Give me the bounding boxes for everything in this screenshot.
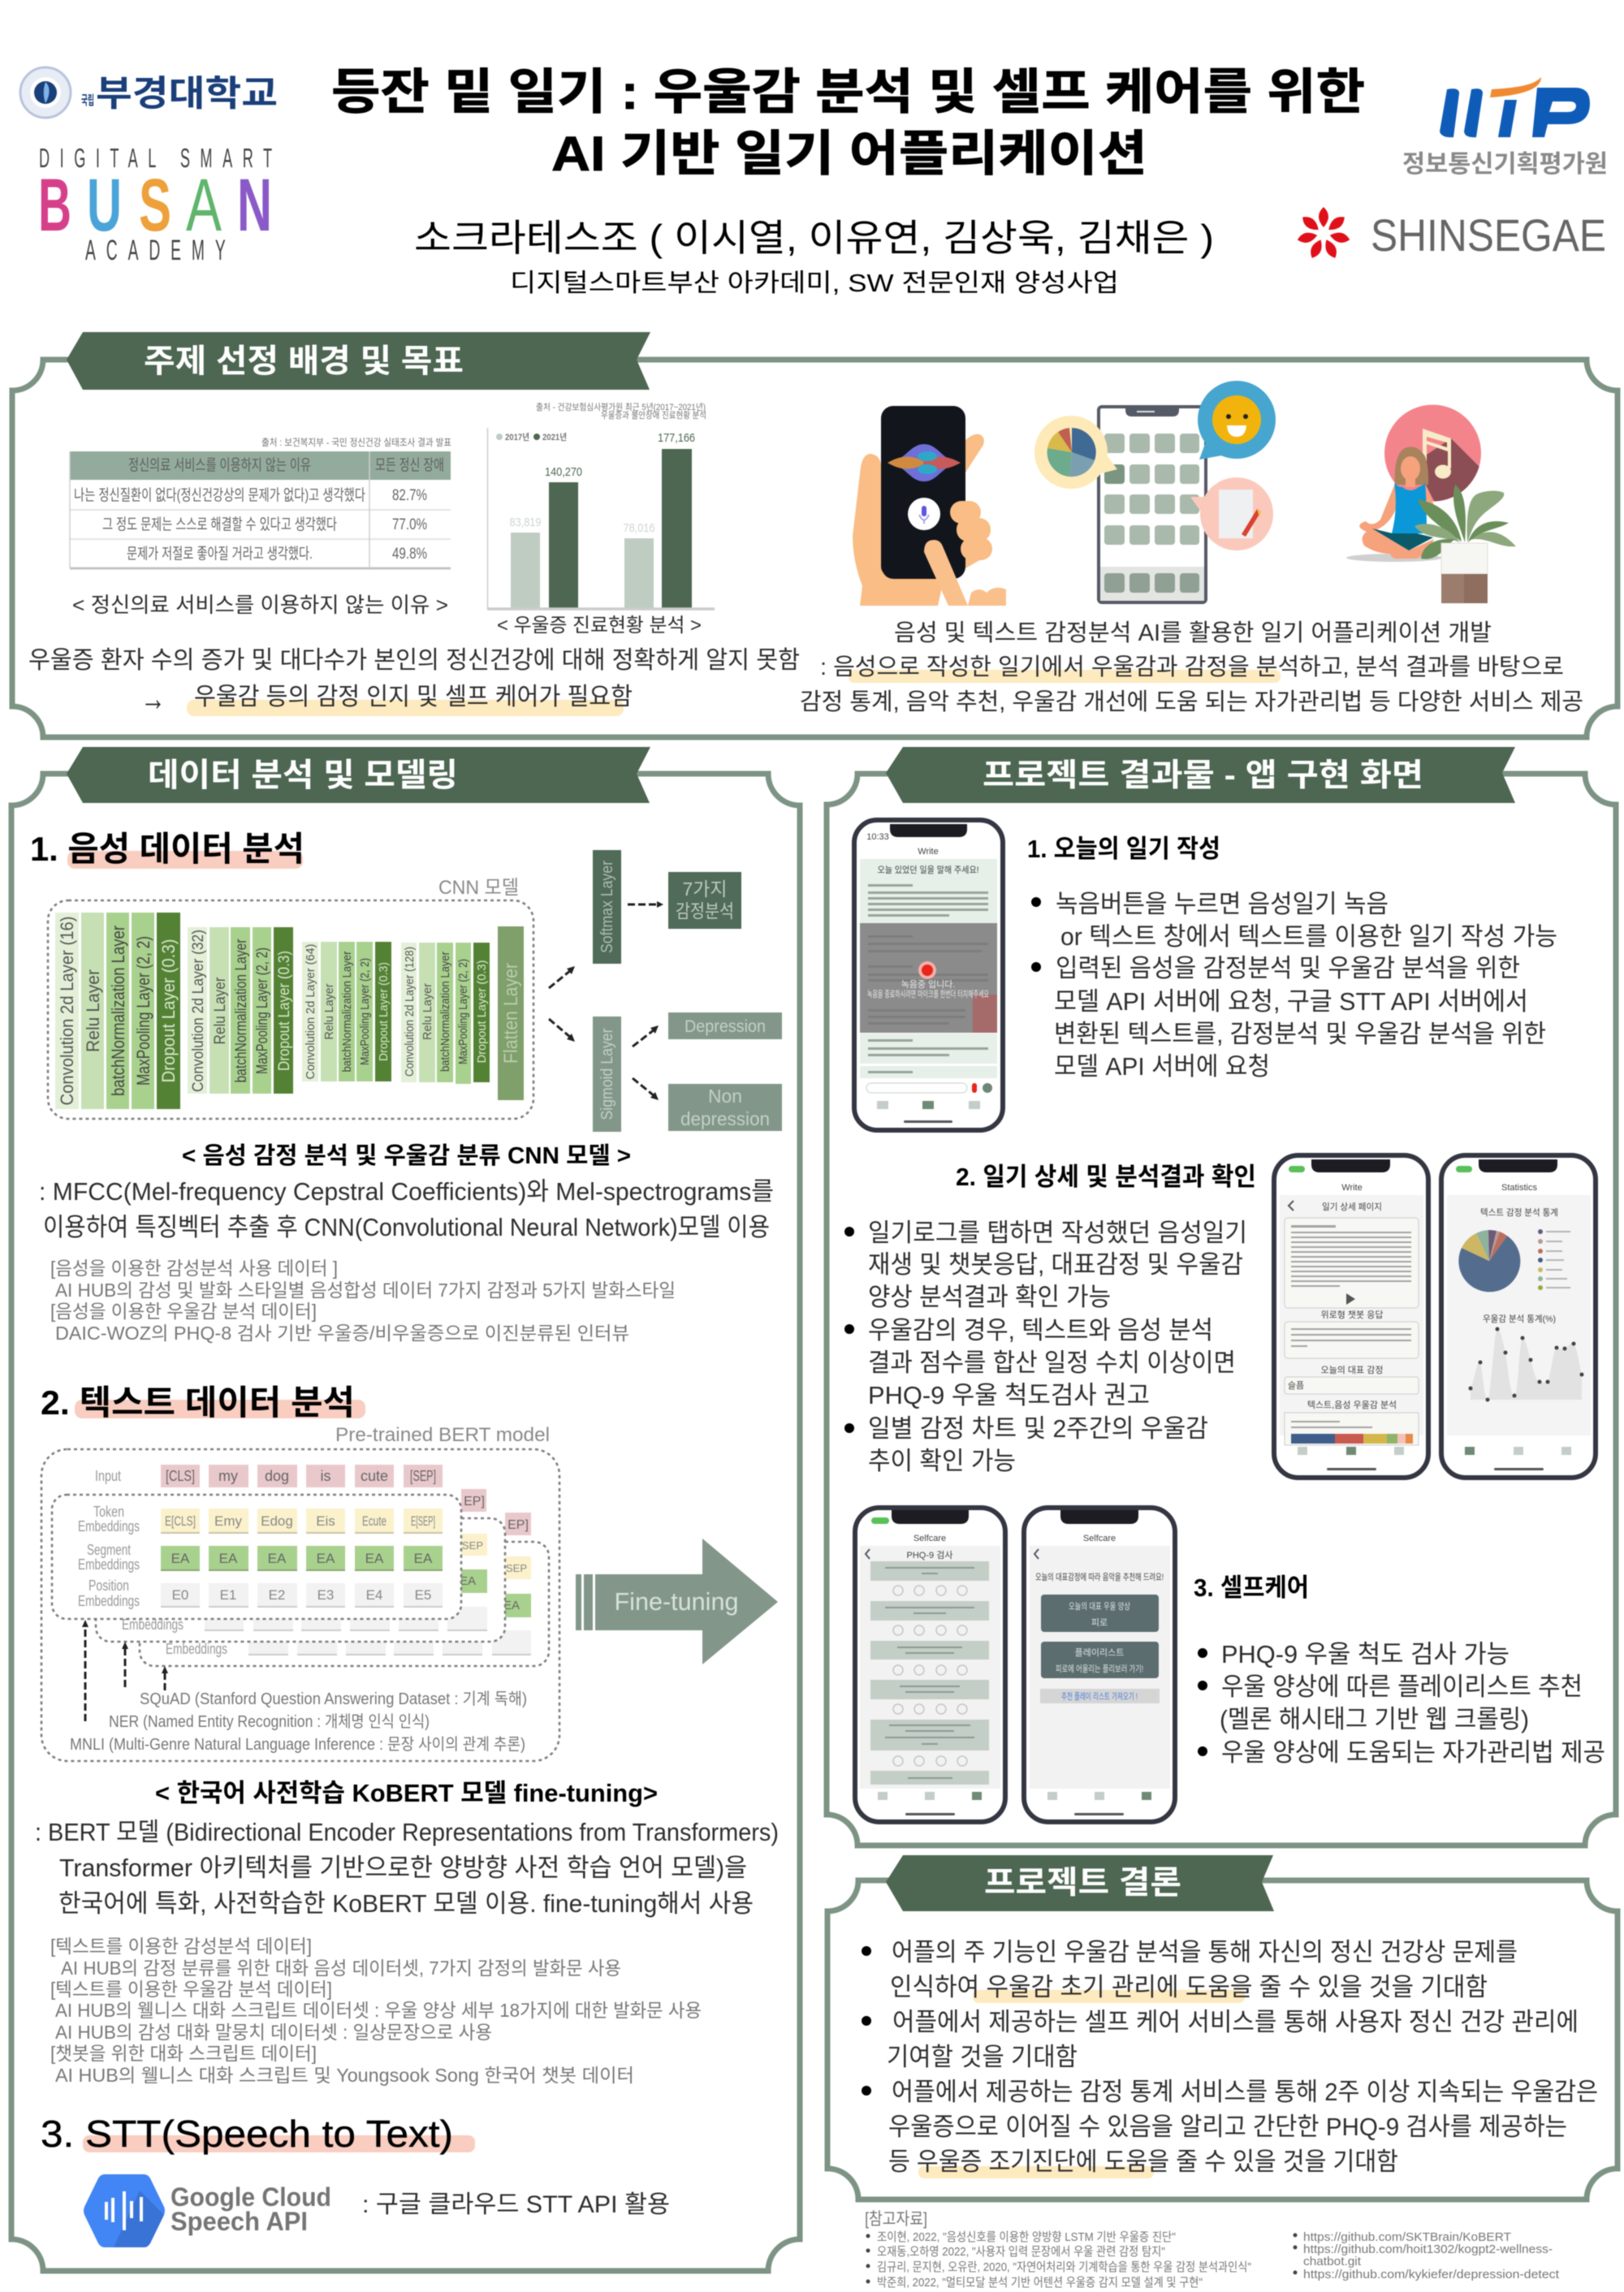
text: app development goal: : 음성으로 작성한 일기에서 우울감과 감정을 분석하고, 분석 결과를 바탕으로 <box>820 654 1564 680</box>
list: step 2 details: 일별 감정 차트 및 2주간의 우울감 <box>868 1414 1208 1443</box>
text: BERT explanation <box>35 1818 779 1918</box>
phone: playlist: 플레이리스트 <box>1075 1647 1124 1658</box>
token embeddings <box>161 1509 443 1533</box>
list: step 2 details: 우울감의 경우, 텍스트와 음성 분석 <box>868 1316 1213 1345</box>
phone: diary detail <box>1274 1155 1428 1478</box>
phone: diary writing: 녹음중 입니다. <box>901 979 955 990</box>
embeddings labels: Segment <box>87 1542 131 1558</box>
list: step 2 details: 결과 점수를 합산 일정 수치 이상이면 <box>868 1349 1236 1377</box>
logo: Digital Smart Busan Academy: S <box>139 164 171 247</box>
output: seven emotions <box>668 872 741 929</box>
references: 조이현, 2022, "음성신호를 이용한 양방향 LSTM 기반 우울증 진단" <box>877 2230 1176 2244</box>
heading: data analysis: 데이터 분석 및 모델링 <box>148 758 458 793</box>
text: background explanation <box>28 647 800 719</box>
text: text datasets: [텍스트를 이용한 감성분석 데이터] <box>50 1936 312 1957</box>
title <box>331 65 1365 181</box>
subheading: STT: 3. STT(Speech to Text) <box>41 2113 453 2155</box>
layer group 4 <box>401 943 490 1084</box>
phone: diary detail: Write <box>1341 1183 1363 1193</box>
phone: PHQ-9 test <box>855 1508 1005 1822</box>
layer group 1: MaxPooling Layer (2, 2) <box>133 936 153 1086</box>
references: 오재동,오하영 2022, "사용자 입력 문장에서 우울 관련 감정 탐지" <box>877 2245 1165 2259</box>
text: pre-training tasks: SQuAD (Stanford Question Answering Dataset : 기계 독해) <box>140 1690 527 1708</box>
references: chatbot.git <box>1303 2255 1362 2268</box>
heading: topic background: 주제 선정 배경 및 목표 <box>144 343 464 379</box>
text: app development goal <box>800 619 1583 715</box>
text: MFCC explanation: : MFCC(Mel-frequency Cepstral Coefficients)와 Mel-spectrograms를 <box>39 1177 774 1206</box>
phone: diary detail: 텍스트,음성 우울감 분석 <box>1307 1400 1397 1410</box>
token embeddings: Eis <box>316 1513 335 1529</box>
sigmoid layer: Sigmoid Layer <box>598 1028 616 1120</box>
phone: statistics <box>1441 1155 1596 1478</box>
softmax layer: Softmax Layer <box>598 861 616 953</box>
list: step 2 details: 일기로그를 탭하면 작성했던 음성일기 <box>868 1219 1247 1247</box>
list: step 1 details: 모델 API 서버에 요청 <box>1054 1052 1270 1081</box>
position embeddings: E3 <box>317 1587 334 1603</box>
logo: Pukyong National University <box>20 67 278 118</box>
table: reasons for not using services: 49.8% <box>392 546 427 563</box>
text: pre-training tasks: MNLI (Multi-Genre Natural Language Inference : 문장 사이의 관계 추론) <box>70 1735 525 1754</box>
icon: pie chart bubble <box>1034 416 1117 489</box>
back encoder stack 3: EP] <box>508 1518 529 1532</box>
layer group 2: Dropout Layer (0.3) <box>276 951 293 1071</box>
text: voice datasets <box>50 1258 676 1344</box>
input row: [SEP] <box>410 1468 436 1484</box>
text: text datasets: [챗봇을 위한 대화 스크립트 데이터] <box>50 2043 317 2064</box>
logo: IITP: 정보통신기획평가원 <box>1402 151 1608 178</box>
logo: Digital Smart Busan Academy <box>38 143 272 265</box>
arrow: fine-tuning <box>576 1539 778 1664</box>
embeddings labels: Position <box>89 1578 129 1594</box>
caption: KoBERT: < 한국어 사전학습 KoBERT 모델 fine-tuning> <box>155 1779 658 1807</box>
icon: potted plant <box>1415 485 1516 603</box>
position embeddings <box>161 1583 443 1607</box>
logo: Digital Smart Busan Academy: DIGITAL SMART <box>39 143 272 173</box>
segment embeddings: EA <box>268 1551 287 1566</box>
token embeddings: Ecute <box>362 1513 387 1529</box>
list: step 3 details: PHQ-9 우울 척도 검사 가능 <box>1221 1640 1510 1668</box>
input row <box>95 1465 443 1487</box>
output: depression <box>668 1012 782 1039</box>
list: step 1 details: 모델 API 서버에 요청, 구글 STT API 서버에서 <box>1054 987 1528 1016</box>
text: voice datasets: [음성을 이용한 우울감 분석 데이터] <box>50 1301 317 1322</box>
text: step 3: 3. 셀프케어 <box>1194 1573 1309 1602</box>
list: step 2 details: 재생 및 챗봇응답, 대표감정 및 우울감 <box>868 1250 1243 1279</box>
back encoder stack 3: EA <box>503 1599 520 1612</box>
pie chart: emotion statistics <box>1458 1229 1570 1292</box>
layer group 2: Relu Layer <box>212 977 229 1044</box>
layer group 3 <box>302 942 391 1081</box>
layer group 4: batchNormalization Layer <box>438 952 452 1072</box>
layer group 2: batchNormalization Layer <box>233 939 250 1083</box>
text: text datasets <box>50 1936 702 2086</box>
list: step 1 details: 변환된 텍스트를, 감정분석 및 우울감 분석을 위한 <box>1054 1020 1546 1048</box>
icon: smiley bubble <box>1198 381 1276 460</box>
softmax layer <box>593 850 621 964</box>
list: conclusions: 어플의 주 기능인 우울감 분석을 통해 자신의 정신 건강상 문제를 <box>892 1938 1518 1966</box>
token embeddings: E[SEP] <box>411 1513 435 1529</box>
layer group 1 <box>55 913 180 1109</box>
text: background explanation: 우울감 등의 감정 인지 및 셀프 케어가 필요함 <box>194 684 633 710</box>
phone: playlist: 오늘의 대표 우울 양상 <box>1069 1601 1130 1612</box>
text: step 2: 2. 일기 상세 및 분석결과 확인 <box>956 1163 1256 1191</box>
arrows between layers <box>549 901 663 1100</box>
flatten layer <box>498 926 524 1100</box>
phone: playlist <box>1024 1508 1175 1822</box>
text: voice datasets: AI HUB의 감성 및 발화 스타일별 음성합성 데이터 7가지 감정과 5가지 발화스타일 <box>55 1280 676 1301</box>
layer group 3: batchNormalization Layer <box>340 952 354 1072</box>
heading: app screens: 프로젝트 결과물 - 앱 구현 화면 <box>983 758 1423 793</box>
title: 등잔 밑 일기 : 우울감 분석 및 셀프 케어를 위한 <box>331 65 1365 119</box>
front encoder stack <box>52 1495 461 1619</box>
text: app development goal: 감정 통계, 음악 추천, 우울감 개선에 도움 되는 자가관리법 등 다양한 서비스 제공 <box>800 689 1583 715</box>
text: pre-training tasks: NER (Named Entity Recognition : 개체명 인식 인식) <box>109 1712 430 1731</box>
list: conclusions: 어플에서 제공하는 셀프 케어 서비스를 통해 사용자 정신 건강 관리에 <box>892 2008 1579 2036</box>
phone: diary detail: 위로형 챗봇 응답 <box>1321 1309 1383 1320</box>
bar chart: depression patient counts: 2021년 <box>542 431 567 442</box>
heading: conclusion: 프로젝트 결론 <box>984 1866 1181 1901</box>
list: step 3 details: (멜론 해시태그 기반 웹 크롤링) <box>1220 1705 1529 1733</box>
table: reasons for not using services <box>70 437 451 568</box>
back encoder stack 2: SEP <box>462 1539 483 1552</box>
input row: is <box>320 1468 331 1484</box>
heading: conclusion <box>886 1855 1274 1911</box>
list: step 1 details: or 텍스트 창에서 텍스트를 이용한 일기 작성 가능 <box>1060 922 1557 951</box>
list: step 2 details: 추이 확인 가능 <box>868 1447 1016 1475</box>
logo: Digital Smart Busan Academy: ACADEMY <box>85 234 226 265</box>
segment embeddings: EA <box>219 1551 238 1566</box>
illustration: meditating woman with music and plant <box>1346 404 1516 603</box>
token embeddings: Emy <box>214 1513 242 1529</box>
phone: playlist: 추천 플레이 리스트 가져오기 ! <box>1061 1690 1138 1702</box>
illustration: hand holding phone with voice assistant <box>853 406 1006 606</box>
line chart: depression trend <box>1468 1327 1583 1401</box>
token embeddings: Edog <box>261 1513 293 1529</box>
text: BERT explanation: 한국어에 특화, 사전학습한 KoBERT 모델 이용. fine-tuning해서 사용 <box>58 1889 754 1918</box>
text: BERT explanation: Transformer 아키텍처를 기반으로한 양방향 사전 학습 언어 모델)을 <box>59 1854 747 1882</box>
heading: topic background <box>67 332 650 390</box>
input row: cute <box>361 1468 388 1484</box>
embeddings labels: Embeddings <box>78 1593 140 1609</box>
segment embeddings <box>161 1546 443 1570</box>
caption: CNN model: < 음성 감정 분석 및 우울감 분류 CNN 모델 > <box>182 1142 631 1169</box>
diagram: BERT model <box>41 1424 559 1761</box>
bar chart: depression patient counts <box>487 402 715 609</box>
text: MFCC explanation: 이용하여 특징벡터 추출 후 CNN(Convolutional Neural Network)모델 이용 <box>43 1213 770 1241</box>
icon: voice wave <box>888 444 961 481</box>
output: seven emotions: 감정분석 <box>676 900 734 922</box>
layer group 1: batchNormalization Layer <box>108 926 128 1096</box>
references: https://github.com/SKTBrain/KoBERT <box>1303 2230 1511 2244</box>
sigmoid layer <box>593 1017 621 1132</box>
input row: my <box>218 1468 238 1484</box>
subheading: text data analysis: 2. 텍스트 데이터 분석 <box>41 1383 355 1422</box>
chart caption: < 우울증 진료현황 분석 > <box>497 615 702 637</box>
table: reasons for not using services: 그 정도 문제는 스스로 해결할 수 있다고 생각했다 <box>102 516 337 533</box>
answer buttons <box>893 1586 967 1766</box>
list: conclusions: 기여할 것을 기대함 <box>887 2043 1078 2071</box>
layer group 4: Relu Layer <box>421 983 434 1040</box>
embeddings labels: Embeddings <box>78 1518 140 1534</box>
segment embeddings: EA <box>414 1551 433 1566</box>
icon: microphone button <box>908 498 940 530</box>
phone: diary detail: 오늘의 대표 감정 <box>1321 1365 1383 1375</box>
text: step 1: 1. 오늘의 일기 작성 <box>1027 835 1220 863</box>
table caption: < 정신의료 서비스를 이용하지 않는 이유 > <box>72 593 448 617</box>
phone: playlist: Selfcare <box>1083 1534 1116 1543</box>
position embeddings: E5 <box>415 1587 431 1603</box>
woman <box>1359 447 1434 559</box>
layer group 3: Convolution 2d Layer (64) <box>304 943 317 1080</box>
output: depression: Depression <box>685 1017 766 1036</box>
subheading: voice data analysis: 1. 음성 데이터 분석 <box>30 830 304 868</box>
table: reasons for not using services: 정신의료 서비스를 이용하지 않는 이유 <box>128 456 311 474</box>
table: reasons for not using services: 82.7% <box>392 487 427 504</box>
phone: PHQ-9 test: Selfcare <box>914 1534 946 1543</box>
list: conclusions: 우울증으로 이어질 수 있음을 알리고 간단한 PHQ-9 검사를 제공하는 <box>888 2113 1567 2141</box>
phone: diary writing: Write <box>918 847 939 857</box>
logo: Digital Smart Busan Academy: A <box>186 164 222 247</box>
embeddings labels: Embeddings <box>78 1556 140 1573</box>
input row: [CLS] <box>166 1468 195 1484</box>
phone: diary detail: 슬픔 <box>1288 1380 1304 1391</box>
table: reasons for not using services: 나는 정신질환이 없다(정신건강상의 문제가 없다)고 생각했다 <box>74 486 365 504</box>
diagram: CNN model: CNN 모델 <box>438 877 519 899</box>
output: non depression: Non <box>708 1086 742 1107</box>
logo: Google Cloud Speech API: Speech API <box>171 2207 308 2236</box>
layer group 2: MaxPooling Layer (2, 2) <box>254 947 271 1074</box>
input row: dog <box>265 1468 289 1484</box>
token embeddings: E[CLS] <box>165 1513 196 1529</box>
bar chart: depression patient counts: 83,819 <box>510 516 541 529</box>
flatten layer: Flatten Layer <box>500 963 522 1064</box>
layer group 4: Dropout Layer (0.3) <box>475 960 489 1064</box>
diagram: CNN model <box>48 850 782 1132</box>
list: step 3 details: 우울 양상에 따른 플레이리스트 추천 <box>1221 1673 1583 1701</box>
logo: Digital Smart Busan Academy: U <box>87 164 122 247</box>
output: non depression: depression <box>680 1108 770 1129</box>
layer group 3: Relu Layer <box>322 984 336 1039</box>
illustration: app grid phone <box>1034 381 1276 602</box>
text: text datasets: [텍스트를 이용한 우울감 분석 데이터] <box>50 1979 332 2000</box>
logo: Shinsegae <box>1296 207 1606 261</box>
text: BERT explanation: : BERT 모델 (Bidirectional Encoder Representations from Transformers) <box>35 1818 779 1846</box>
panel: project conclusion <box>827 1855 1618 2199</box>
affiliation: 디지털스마트부산 아카데미, SW 전문인재 양성사업 <box>510 269 1119 297</box>
bar chart: depression patient counts: 140,270 <box>545 465 582 479</box>
logo: Pukyong National University: 국립 <box>81 93 94 108</box>
position embeddings: E0 <box>172 1587 188 1603</box>
question cards <box>870 1561 989 1785</box>
position embeddings: E1 <box>220 1587 236 1603</box>
logo: Google Cloud Speech API: Google Cloud <box>171 2182 331 2212</box>
diary card lines <box>868 884 988 917</box>
references: [참고자료] <box>865 2210 927 2229</box>
phone: playlist: 피로 <box>1091 1617 1108 1628</box>
logo: Digital Smart Busan Academy: B <box>38 164 71 247</box>
references: 김규리, 문지현, 오유란, 2020, "자연어처리와 기계학습을 통한 우울 감정 분석과인식" <box>877 2260 1251 2274</box>
layer group 3: MaxPooling Layer (2, 2) <box>358 958 372 1065</box>
layer group 1: Convolution 2d Layer (16) <box>57 916 77 1106</box>
position embeddings: E4 <box>366 1587 382 1603</box>
list: step 2 details: PHQ-9 우울 척도검사 권고 <box>868 1381 1150 1409</box>
text: STT API: : 구글 클라우드 STT API 활용 <box>362 2191 670 2218</box>
back encoder stack 2: Embeddings <box>122 1616 184 1633</box>
embeddings labels: Token <box>93 1504 124 1520</box>
embeddings labels <box>78 1504 140 1609</box>
logo: IITP <box>1402 77 1608 178</box>
arrow: fine-tuning: Fine-tuning <box>614 1587 739 1616</box>
phone: statistics: Statistics <box>1501 1183 1538 1193</box>
layer group 4: Convolution 2d Layer (128) <box>403 947 417 1077</box>
back encoder stack 3: SEP <box>506 1562 527 1574</box>
references: 박준희, 2022, "멀티모달 분석 기반 어텐션 우울증 감지 모델 설계 및 구현" <box>877 2276 1203 2290</box>
list: conclusions <box>862 1938 1598 2178</box>
table: reasons for not using services: 77.0% <box>392 516 427 533</box>
phone: playlist: 피로에 어울리는 플리보러 가기! <box>1056 1664 1143 1674</box>
text: voice datasets: DAIC-WOZ의 PHQ-8 검사 기반 우울증/비우울증으로 이진분류된 인터뷰 <box>55 1323 629 1344</box>
list: step 1 details <box>1031 890 1557 1081</box>
table: reasons for not using services: 문제가 저절로 좋아질 거라고 생각했다. <box>127 545 313 563</box>
title: AI 기반 일기 어플리케이션 <box>551 127 1147 181</box>
text: text datasets: AI HUB의 감성 대화 말뭉치 데이터셋 : 일상문장으로 사용 <box>55 2022 492 2043</box>
arrows: pre-training tasks <box>82 1620 168 1721</box>
list: step 3 details: 우울 양상에 도움되는 자가관리법 제공 <box>1221 1738 1605 1767</box>
text: pre-training tasks <box>70 1690 527 1754</box>
layer group 3: Dropout Layer (0.3) <box>377 962 391 1061</box>
list: conclusions: 등 우울증 조기진단에 도움을 줄 수 있을 것을 기대함 <box>888 2147 1398 2176</box>
bar chart: depression patient counts: 78,016 <box>624 521 654 535</box>
input row: Input <box>95 1468 121 1484</box>
phone: PHQ-9 test: PHQ-9 검사 <box>907 1550 952 1560</box>
logo: Google Cloud Speech API <box>84 2174 331 2247</box>
text: text datasets: AI HUB의 감정 분류를 위한 대화 음성 데이터셋, 7가지 감정의 발화문 사용 <box>61 1957 621 1979</box>
list: step 1 details: 입력된 음성을 감정분석 및 우울감 분석을 위한 <box>1056 954 1520 982</box>
list: conclusions: 어플에서 제공하는 감정 통계 서비스를 통해 2주 이상 지속되는 우울감은 <box>892 2078 1598 2106</box>
table: reasons for not using services: 출처 : 보건복지부 - 국민 정신건강 실태조사 결과 발표 <box>261 437 451 448</box>
list: step 1 details: 녹음버튼을 누르면 음성일기 녹음 <box>1056 890 1389 918</box>
icon: music note <box>1423 429 1451 479</box>
output: seven emotions: 7가지 <box>682 878 728 900</box>
logo: Pukyong National University: 부경대학교 <box>96 74 278 114</box>
heading: app screens <box>886 747 1515 803</box>
layer group 1: Dropout Layer (0.3) <box>158 939 179 1083</box>
back encoder stack 2: EA <box>460 1574 476 1588</box>
back encoder stack 2 <box>96 1489 505 1642</box>
text: app development goal: 음성 및 텍스트 감정분석 AI를 활용한 일기 어플리케이션 개발 <box>894 619 1492 646</box>
layer group 2: Convolution 2d Layer (32) <box>190 930 207 1092</box>
heading: data analysis <box>67 747 650 803</box>
back encoder stack 3 <box>140 1513 549 1666</box>
references: https://github.com/hoit1302/kogpt2-wellness- <box>1303 2242 1553 2256</box>
list: step 2 details: 양상 분석결과 확인 가능 <box>868 1283 1111 1311</box>
list: step 3 details <box>1198 1640 1605 1767</box>
back encoder stack 2: EP] <box>464 1495 485 1509</box>
phone: diary writing: 녹음을 종료하시려면 마이크를 한번더 터치해주세요 <box>867 988 989 999</box>
text: text datasets: AI HUB의 웰니스 대화 스크립트 및 Youngsook Song 한국어 챗봇 데이터 <box>55 2065 634 2086</box>
layer group 1: Relu Layer <box>83 969 103 1052</box>
phone: diary detail: 일기 상세 페이지 <box>1322 1201 1382 1212</box>
phone: statistics: 우울감 분석 통계(%) <box>1483 1314 1556 1324</box>
panel: data analysis and modeling <box>11 747 800 2271</box>
references <box>865 2210 1560 2290</box>
text: background explanation: → <box>140 679 166 719</box>
segment embeddings: EA <box>171 1551 190 1566</box>
output: non depression <box>668 1084 782 1131</box>
list: step 2 details <box>844 1219 1247 1475</box>
position embeddings: E2 <box>269 1587 285 1603</box>
logo: Digital Smart Busan Academy: N <box>237 164 272 247</box>
phone: statistics: 텍스트 감정 분석 통계 <box>1480 1207 1558 1218</box>
bar chart: depression patient counts: 우울증과 불안장애 진료현황 분석 <box>601 410 706 421</box>
bar chart: depression patient counts: 2017년 <box>505 431 529 442</box>
layer group 4: MaxPooling Layer (2, 2) <box>456 959 470 1064</box>
icon: notebook bubble <box>1190 477 1273 550</box>
text: text datasets: AI HUB의 웰니스 대화 스크립트 데이터셋 : 우울 양상 세부 18가지에 대한 발화문 사용 <box>55 2000 702 2021</box>
references: https://github.com/kykiefer/depression-detect <box>1303 2268 1560 2281</box>
panel: topic background and goals <box>12 332 1618 737</box>
text: MFCC explanation <box>39 1177 774 1241</box>
bar chart: depression patient counts: 출처 - 건강보험심사평가원 최근 5년(2017~2021년) <box>536 402 706 412</box>
table: reasons for not using services: 모든 정신 장애 <box>375 456 444 474</box>
phone: diary writing: 오늘 있었던 일을 말해 주세요! <box>877 864 979 875</box>
diagram: BERT model: Pre-trained BERT model <box>335 1424 550 1446</box>
segment embeddings: EA <box>317 1551 335 1566</box>
bar chart: depression patient counts: 177,166 <box>658 431 695 445</box>
phone: diary writing: 10:33 <box>866 832 889 842</box>
text: background explanation: 우울증 환자 수의 증가 및 대다수가 본인의 정신건강에 대해 정확하게 알지 못함 <box>28 647 800 674</box>
phone: playlist: 오늘의 대표감정에 따라 음악을 추천해 드려요! <box>1035 1571 1164 1582</box>
list: conclusions: 인식하여 우울감 초기 관리에 도움을 줄 수 있을 것을 기대함 <box>890 1973 1488 2001</box>
segment embeddings: EA <box>365 1551 384 1566</box>
layer group 2 <box>188 927 293 1094</box>
team names: 소크라테스조 ( 이시열, 이유연, 김상욱, 김채은 ) <box>414 217 1214 259</box>
panel: app screens <box>827 747 1616 1845</box>
text: voice datasets: [음성을 이용한 감성분석 사용 데이터 ] <box>50 1258 338 1279</box>
phone: diary writing <box>854 820 1003 1130</box>
back encoder stack 3: Embeddings <box>166 1641 227 1657</box>
